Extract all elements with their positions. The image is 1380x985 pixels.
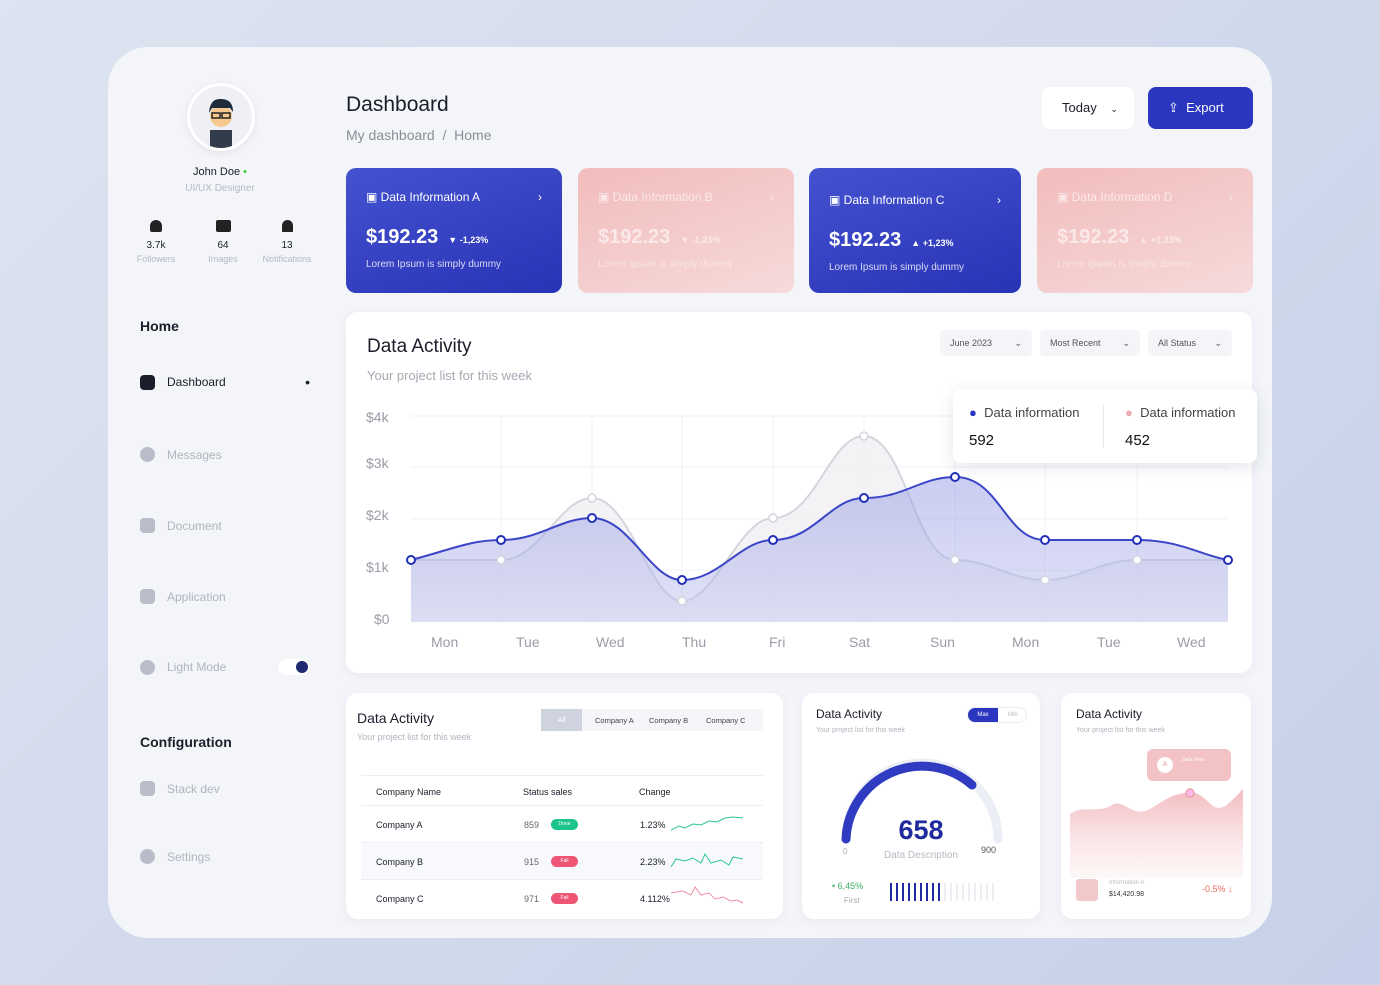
kpi card D: $192.23 ▲ +1,23% <box>1057 226 1181 248</box>
panel: gauge: 658 <box>898 815 944 845</box>
tooltip legend: 592 <box>969 432 994 449</box>
line chart: Thu <box>682 634 706 650</box>
panel: company table: 859 <box>524 820 539 830</box>
line chart: Tue <box>516 634 540 650</box>
kpi card A: $192.23 ▼ -1,23% <box>366 226 488 248</box>
panel: pink area chart: Your project list for this week <box>1076 727 1165 734</box>
nav dashboard: Dashboard <box>167 375 226 389</box>
panel: pink area chart: Data Activity <box>1076 707 1142 721</box>
profile stats: 64 <box>217 240 229 251</box>
page title: Dashboard <box>346 93 449 116</box>
today dropdown <box>1042 87 1134 129</box>
nav dashboard: • <box>305 374 310 390</box>
chart title <box>367 336 532 383</box>
panel: company table: 1.23% <box>640 820 666 830</box>
filter dropdowns: All Status <box>1158 338 1196 348</box>
profile stats <box>137 220 312 264</box>
kpi card B: ▣ Data Information B <box>598 190 713 204</box>
panel: company table: Change <box>639 787 671 797</box>
tooltip legend: 452 <box>1125 432 1150 449</box>
kpi card C: › <box>997 193 1001 207</box>
panel: data activity chart <box>346 312 1252 673</box>
panel: company table <box>346 693 783 919</box>
panel: gauge: 900 <box>981 845 996 855</box>
kpi card C: $192.23 ▲ +1,23% <box>829 229 953 251</box>
line chart: Mon <box>431 634 458 650</box>
nav light mode <box>140 659 310 675</box>
panel: company table: Company C <box>376 894 424 904</box>
panel: company table: Status sales <box>523 787 572 797</box>
kpi card A <box>346 168 562 293</box>
line chart: Wed <box>1177 634 1206 650</box>
nav stack dev <box>140 781 220 796</box>
line chart: $4k <box>366 409 390 425</box>
panel: company table: Company B <box>649 716 688 725</box>
kpi card C: ▣ Data Information C <box>829 193 944 207</box>
nav application <box>140 589 226 604</box>
profile name: John Doe • <box>193 166 247 178</box>
tooltip legend: ● Data information <box>1125 405 1235 420</box>
profile avatar <box>187 83 255 151</box>
panel: pink area chart: A <box>1163 761 1167 768</box>
filter dropdowns: ⌄ <box>1014 338 1022 348</box>
panel: company table: Company C <box>706 716 746 725</box>
line chart: $1k <box>366 559 390 575</box>
filter dropdowns: ⌄ <box>1122 338 1130 348</box>
profile name <box>185 166 255 194</box>
nav light mode: Light Mode <box>167 660 226 674</box>
panel: company table: Done <box>559 821 570 827</box>
nav heading configuration: Configuration <box>140 734 232 750</box>
line chart: Fri <box>769 634 785 650</box>
main panel <box>108 47 1272 938</box>
kpi card D: › <box>1229 190 1233 204</box>
filter dropdowns: ⌄ <box>1214 338 1222 348</box>
line chart: $2k <box>366 507 390 523</box>
panel: pink area chart: Data View <box>1182 757 1205 763</box>
panel: company table: Company B <box>376 857 423 867</box>
kpi card A: › <box>538 190 542 204</box>
nav heading home: Home <box>140 318 179 334</box>
page title: My dashboard / Home <box>346 127 492 143</box>
line chart: $0 <box>374 611 390 627</box>
kpi card C <box>809 168 1021 293</box>
line chart: Tue <box>1097 634 1121 650</box>
chart title: Data Activity <box>367 336 472 357</box>
panel: company table: Company A <box>595 716 634 725</box>
profile stats: Followers <box>137 254 175 264</box>
kpi card D: Lorem Ipsum is simply dummy <box>1057 259 1192 270</box>
chart title: Your project list for this week <box>367 368 532 383</box>
line chart: Mon <box>1012 634 1039 650</box>
panel: pink area chart: -0.5% ↓ <box>1202 884 1233 894</box>
line chart: Sat <box>849 634 870 650</box>
nav document <box>140 518 222 533</box>
tooltip legend: ● Data information <box>969 405 1079 420</box>
export button: ⇪ Export <box>1168 100 1224 115</box>
panel: gauge: Data Description <box>884 850 958 861</box>
line chart <box>366 409 1233 650</box>
panel: gauge: Data Activity <box>816 707 882 721</box>
filter dropdowns: June 2023 <box>950 338 992 348</box>
profile stats: 13 <box>281 240 293 251</box>
kpi card B: $192.23 ▼ -1,23% <box>598 226 720 248</box>
profile stats: 3.7k <box>147 240 165 251</box>
profile name: UI/UX Designer <box>185 183 255 194</box>
panel: gauge: Your project list for this week <box>816 727 905 734</box>
panel: pink area chart <box>1061 693 1251 919</box>
panel: pink area chart: Information A <box>1109 880 1144 886</box>
panel: company table: 2.23% <box>640 857 666 867</box>
kpi card D: ▣ Data Information D <box>1057 190 1172 204</box>
nav messages: Messages <box>167 448 222 462</box>
kpi card C: Lorem Ipsum is simply dummy <box>829 262 964 273</box>
kpi card B: Lorem Ipsum is simply dummy <box>598 259 733 270</box>
tooltip legend <box>953 389 1257 463</box>
panel: company table: Fail <box>560 858 569 864</box>
panel: company table: 4.112% <box>640 894 670 904</box>
nav messages <box>140 447 222 462</box>
panel: gauge: First <box>844 896 860 905</box>
nav application: Application <box>167 590 226 604</box>
line chart: Sun <box>930 634 955 650</box>
kpi card A: ▣ Data Information A <box>366 190 480 204</box>
kpi card A: Lorem Ipsum is simply dummy <box>366 259 501 270</box>
panel: company table: 971 <box>524 894 539 904</box>
nav dashboard <box>140 374 310 390</box>
panel: company table: 915 <box>524 857 539 867</box>
kpi card B <box>578 168 794 293</box>
filter dropdowns <box>940 330 1232 356</box>
panel: gauge <box>802 693 1040 919</box>
filter dropdowns: Most Recent <box>1050 338 1101 348</box>
panel: company table: Company A <box>376 820 423 830</box>
panel: company table: Company Name <box>376 787 441 797</box>
panel: gauge: • 6,45% <box>832 881 863 891</box>
profile stats: Images <box>208 254 238 264</box>
panel: company table: All <box>557 715 566 724</box>
nav settings <box>140 849 210 864</box>
panel: company table: Fail <box>560 895 569 901</box>
line chart: $3k <box>366 455 390 471</box>
line chart: Wed <box>596 634 625 650</box>
panel: gauge: 0 <box>843 847 847 856</box>
profile stats: Notifications <box>262 254 312 264</box>
panel: pink area chart: $14,420.98 <box>1109 891 1144 898</box>
nav settings: Settings <box>167 850 210 864</box>
nav document: Document <box>167 518 222 532</box>
nav stack dev: Stack dev <box>167 782 220 796</box>
kpi card B: › <box>770 190 774 204</box>
kpi card D <box>1037 168 1253 293</box>
panel: company table: Data Activity <box>357 710 434 726</box>
panel: gauge: Min <box>1008 712 1018 718</box>
today dropdown: Today ⌄ <box>1062 100 1118 115</box>
panel: gauge: Max <box>977 712 989 718</box>
panel: company table: Your project list for this week <box>357 732 471 742</box>
page title <box>346 93 492 143</box>
export button <box>1148 87 1253 129</box>
